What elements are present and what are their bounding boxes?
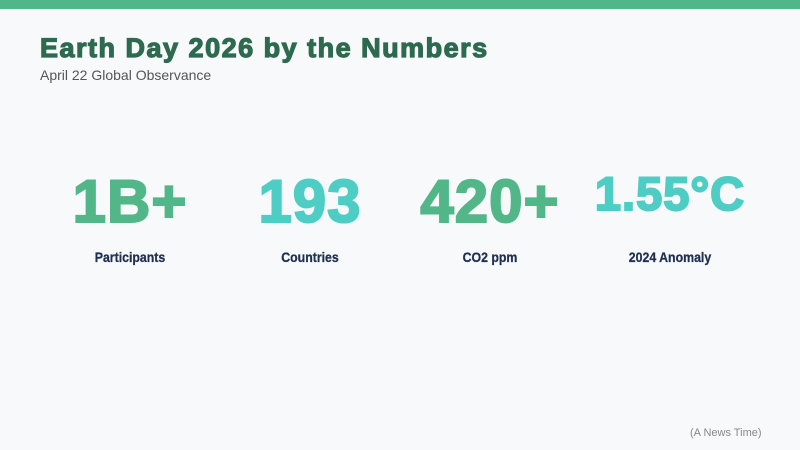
label: Countries <box>281 249 339 265</box>
label: 2024 Anomaly <box>629 249 711 265</box>
number: 193 <box>258 168 362 235</box>
stat: co2 <box>420 168 560 266</box>
number: 1.55°C <box>595 167 745 220</box>
top bar <box>0 0 800 9</box>
number: 420+ <box>420 168 560 235</box>
source: (A News Time) <box>690 427 762 439</box>
stat: anomaly <box>595 167 745 266</box>
stat: countries <box>258 168 362 265</box>
label: Participants <box>95 249 165 265</box>
stat: participants <box>73 168 187 266</box>
subtitle: April 22 Global Observance <box>40 67 211 83</box>
label: CO2 ppm <box>463 249 517 265</box>
title: Earth Day 2026 by the Numbers <box>40 33 489 63</box>
number: 1B+ <box>73 168 187 235</box>
